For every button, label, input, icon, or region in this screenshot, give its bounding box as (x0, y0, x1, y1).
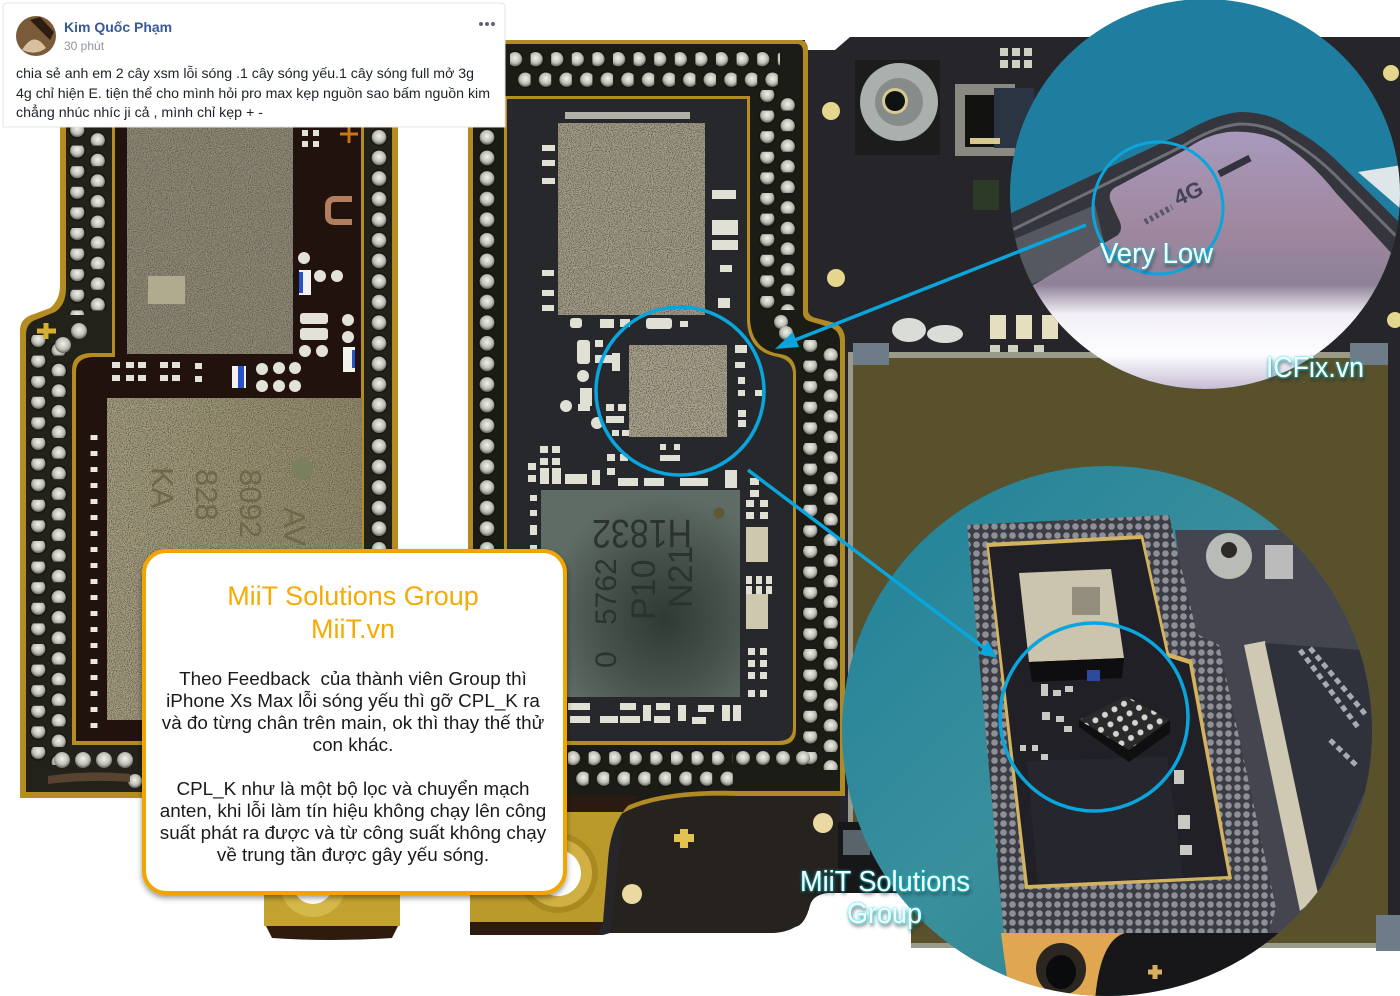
panel: main PCB photo (468, 37, 1400, 948)
bezel highlight (1008, 124, 1400, 245)
IC marking: N21 (662, 546, 700, 608)
main PCB left gold frame (468, 40, 845, 813)
black underside strip (1029, 658, 1124, 682)
callout paragraph 2: CPL_K như là một bộ lọc và chuyển mạch (176, 778, 530, 800)
IC marking: P10 (625, 560, 663, 620)
black memory chip (1027, 757, 1183, 884)
component area (1020, 684, 1192, 855)
bezel mottled lower left (1012, 205, 1106, 285)
callout paragraph 2: về trung tần được gây yếu sóng. (217, 844, 489, 865)
left PCB plus mark (340, 127, 358, 143)
lower board brown tint (610, 794, 840, 933)
RF connector (1206, 533, 1293, 579)
shield clips (853, 343, 1400, 951)
CPL_K chip (629, 345, 727, 437)
gold plus lower board (674, 829, 694, 848)
gold plus mark (37, 323, 56, 339)
display cable white strip (1244, 641, 1322, 911)
main PCB solder balls (477, 49, 841, 789)
callout paragraph 2: anten, khi lỗi làm tín hiệu không chạy lên công (160, 800, 546, 821)
4G status indicator (1145, 158, 1250, 222)
left PCB large chip: 828 (189, 469, 224, 521)
callout paragraph 1: và đo từng chân trên main, ok thì thay thế thử (162, 712, 545, 733)
callout paragraph 1 (162, 668, 545, 755)
mount hole (1036, 943, 1086, 995)
test point lower left (622, 884, 642, 904)
screen scratches (1300, 648, 1366, 765)
callout paragraph 1: con khác. (313, 734, 393, 755)
main PCB small components (528, 112, 772, 724)
highlight circle: CPL_K on PCB (596, 307, 764, 475)
4G status indicator: 4G (1170, 176, 1207, 211)
label: MiiT Solutions Group: MiiT Solutions (800, 866, 970, 898)
panel: olive RF shield (848, 343, 1400, 951)
cavity gold edge (986, 535, 1232, 889)
callout heading (227, 581, 479, 644)
author name: Kim Quốc Phạm (64, 19, 172, 35)
IC marking: 5762 (590, 558, 623, 625)
left PCB large chip: AV (277, 507, 312, 546)
callout paragraph 1: Theo Feedback của thành viên Group thì (179, 668, 527, 689)
arrow: to bottom zoom (748, 470, 997, 658)
display cable dark panel (1265, 643, 1375, 894)
left tab ring (280, 851, 346, 917)
panel: top right zoom photo (1005, 0, 1400, 400)
white metal chip (1019, 569, 1124, 662)
plus mark (1148, 965, 1162, 979)
label: Very Low: Very Low (1100, 238, 1214, 270)
panel: bottom right zoom photo (840, 460, 1380, 996)
panel: board strip left of bottom zoom (838, 822, 908, 893)
left PCB large chip (107, 398, 362, 720)
white patch right of phone (1358, 165, 1400, 210)
post time: 30 phút (64, 39, 105, 53)
label: ICFix.vn: ICFix.vn (1266, 352, 1364, 384)
label: MiiT Solutions Group: Group (847, 898, 922, 930)
panel: white lower notch (827, 893, 911, 996)
board frame (967, 515, 1276, 935)
post text: 4g chỉ hiện E. tiện thể cho mình hỏi pro max kẹp nguồn sao bấm nguồn kim (16, 85, 490, 101)
panel: left PCB photo (20, 110, 398, 798)
callout heading: MiiT.vn (311, 614, 395, 644)
small parts (892, 48, 1058, 360)
left PCB lower brown band (48, 772, 130, 784)
large IC (541, 490, 740, 697)
phone bezel (1005, 112, 1400, 400)
left PCB copper C mark (328, 199, 352, 222)
post text: chia sẻ anh em 2 cây xsm lỗi sóng .1 cây sóng yếu.1 cây sóng full mở 3g (16, 65, 474, 81)
left PCB pad (148, 276, 185, 304)
label: MiiT Solutions Group (800, 866, 970, 930)
callout: explanation box (144, 551, 565, 893)
left PCB small components (112, 130, 355, 392)
chip round mark (291, 458, 313, 480)
panel: upper right PCB components (822, 48, 1400, 360)
panel: lower gold mounting tab left (264, 851, 400, 940)
icon: small connector (843, 830, 870, 855)
highlight circle: chip removed (1000, 623, 1188, 811)
IC pin one dot (714, 508, 724, 518)
avatar (16, 16, 56, 56)
frame right black board (1175, 530, 1380, 950)
removed BGA chip (1079, 696, 1170, 762)
test point lower right (813, 813, 833, 833)
callout paragraph 2 (160, 778, 547, 865)
panel: facebook post card (3, 3, 505, 127)
cavity (989, 539, 1228, 885)
blue capacitor (1087, 670, 1100, 681)
more options dots (479, 22, 495, 26)
gold ring with hole (518, 833, 598, 913)
phone screen (1032, 132, 1391, 389)
IC marking: H1832 (592, 511, 692, 555)
lower PCB gold tab (470, 796, 833, 935)
shield chip top (558, 123, 705, 315)
highlight circle: signal indicator (1093, 142, 1223, 274)
IC marking (590, 511, 700, 668)
callout paragraph 2: suất phát ra được và từ công suất không chạy (160, 822, 547, 843)
left PCB large chip: KA (145, 467, 180, 509)
left PCB shield chip (127, 127, 293, 354)
RF connector (955, 84, 1034, 156)
post text (16, 65, 490, 120)
left PCB strip components (90, 435, 98, 729)
post text: chẳng nhúc nhíc ji cả , mình chỉ kẹp + - (16, 103, 263, 120)
gold test points (822, 65, 1400, 328)
callout heading: MiiT Solutions Group (227, 581, 479, 611)
IC marking: 0 (590, 651, 623, 668)
arrow: to top zoom (775, 225, 1086, 349)
black lower board (1095, 933, 1278, 996)
left PCB solder balls (28, 125, 391, 788)
chip datamatrix (1072, 587, 1100, 615)
callout paragraph 1: iPhone Xs Max lỗi sóng yếu thì gỡ CPL_K ra (166, 690, 540, 712)
gold mount tab (1001, 933, 1125, 996)
chip marking: 8092 (233, 469, 268, 538)
antenna screw (855, 60, 940, 155)
